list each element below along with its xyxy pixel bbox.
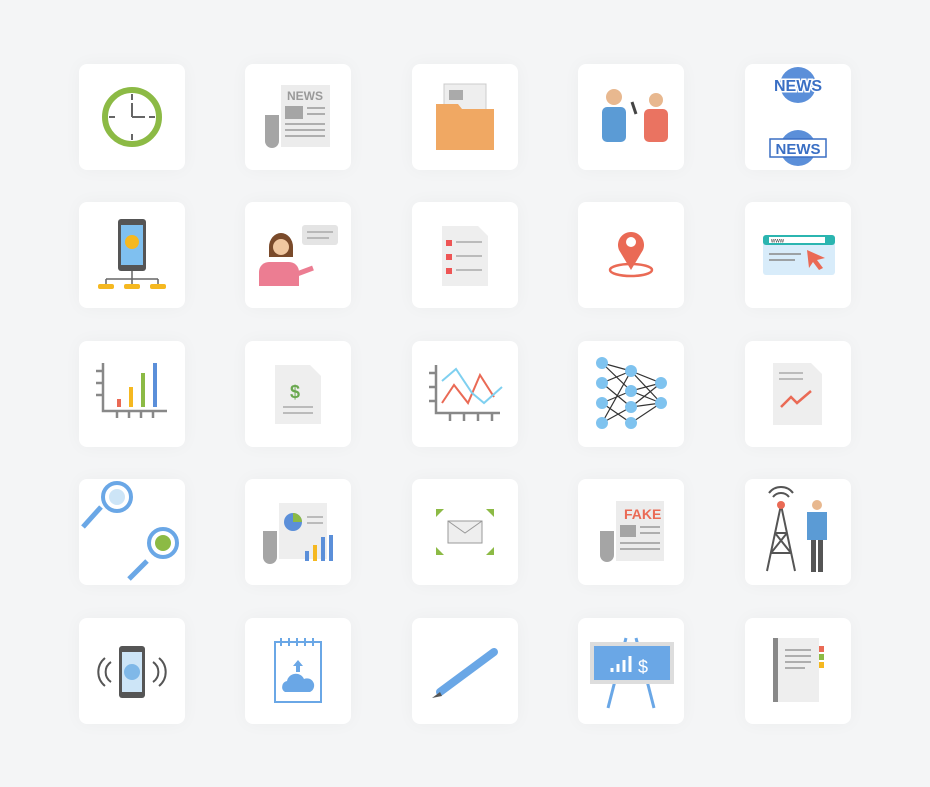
tile: newspaper: NEWS	[287, 89, 323, 103]
tile: report growth	[745, 341, 851, 447]
tile: report pie	[245, 479, 351, 585]
tile: email arrows	[412, 479, 518, 585]
tile: notebook	[745, 618, 851, 724]
tile: phone network	[79, 202, 185, 308]
tile: invoice	[245, 341, 351, 447]
tile: bar chart	[79, 341, 185, 447]
tile: reporter tower	[745, 479, 851, 585]
tile: web browser: www	[770, 238, 785, 244]
tile: presentation board: $	[638, 657, 648, 677]
tile: magnifiers	[79, 479, 185, 585]
tile: newspaper	[245, 64, 351, 170]
tile: news globes: NEWS	[774, 78, 822, 95]
tile: presentation board	[578, 618, 684, 724]
tile: news globes: NEWS	[776, 141, 820, 158]
tile: fake news: FAKE	[624, 506, 661, 522]
tile: pencil	[412, 618, 518, 724]
tile: folder	[412, 64, 518, 170]
tile: clock	[79, 64, 185, 170]
tile: line chart	[412, 341, 518, 447]
tile: location pin	[578, 202, 684, 308]
tile: web browser	[745, 202, 851, 308]
tile: presenter	[245, 202, 351, 308]
tile: cloud notepad	[245, 618, 351, 724]
tile: phone contact	[79, 618, 185, 724]
tile: checklist	[412, 202, 518, 308]
tile: interview	[578, 64, 684, 170]
tile: invoice: $	[290, 382, 300, 402]
tile: fake news	[578, 479, 684, 585]
tile: news globes	[745, 64, 851, 170]
tile: neural network	[578, 341, 684, 447]
